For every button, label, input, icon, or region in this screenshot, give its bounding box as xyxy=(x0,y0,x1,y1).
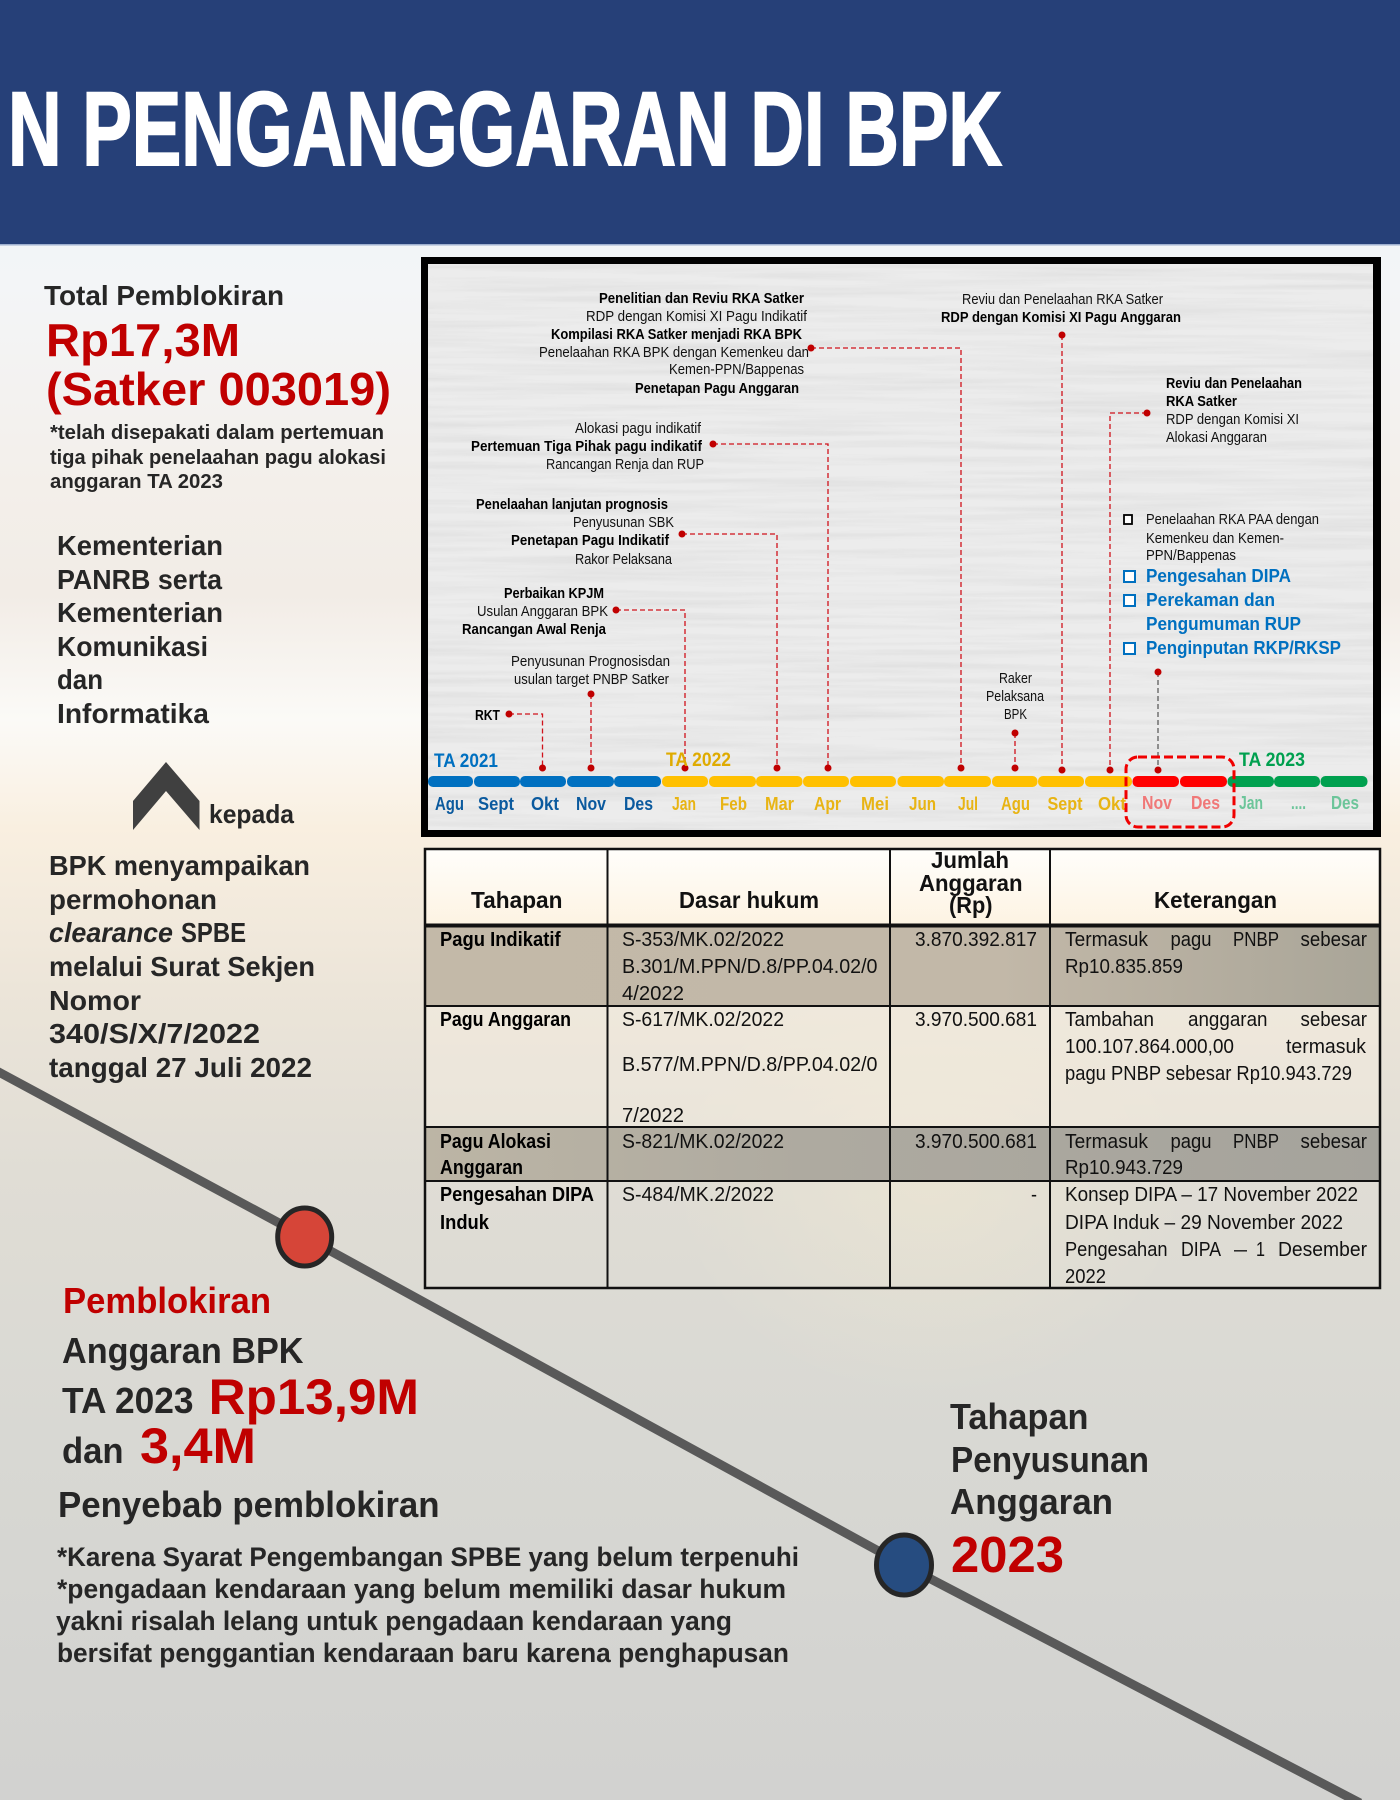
table row: pagu indikatif: pagu xyxy=(1170,929,1212,951)
timeline text: prognosis group: Penelaahan lanjutan prognosis xyxy=(476,497,668,513)
timeline text: Raker xyxy=(986,671,1045,723)
table row: pagu alokasi anggaran: Pagu Alokasi xyxy=(440,1131,551,1153)
timeline text: Raker: Pelaksana xyxy=(986,689,1045,705)
timeline text: KPJM group: Rancangan Awal Renja xyxy=(462,622,607,638)
penyebab pemblokiran block: bersifat penggantian kendaraan baru karena penghapusan xyxy=(57,1638,789,1668)
timeline month labels: Okt xyxy=(531,794,559,814)
timeline month labels: Nov xyxy=(576,794,606,814)
table row: pengesahan DIPA induk: 1 xyxy=(1256,1239,1265,1261)
tahapan penyusunan anggaran block: 2023 xyxy=(951,1526,1064,1583)
table row: pagu anggaran: S-617/MK.02/2022 xyxy=(622,1009,784,1031)
timeline text: first group: RDP dengan Komisi XI Pagu Indikatif xyxy=(586,309,808,325)
tahapan penyusunan anggaran block: Tahapan xyxy=(950,1396,1088,1437)
timeline leader dots xyxy=(506,332,1162,774)
timeline month labels: Okt xyxy=(1098,794,1126,814)
timeline text: prognosis group xyxy=(476,497,674,568)
timeline text: prognosis group: Penetapan Pagu Indikatif xyxy=(511,533,669,549)
timeline text: alokasi anggaran: RKA Satker xyxy=(1166,394,1237,410)
timeline bar segments xyxy=(428,776,1368,787)
kementerian block xyxy=(57,530,223,729)
tahapan penyusunan anggaran block: Penyusunan xyxy=(951,1439,1149,1480)
timeline text: prognosis PNBP: usulan target PNBP Satker xyxy=(514,672,669,688)
kementerian block: PANRB serta xyxy=(57,564,222,595)
table row: pagu indikatif: B.301/M.PPN/D.8/PP.04.02/0 xyxy=(622,956,878,978)
permohonan clearance block: permohonan xyxy=(49,884,217,915)
total pemblokiran block: *telah disepakati dalam pertemuan xyxy=(50,422,384,444)
timeline text: first group: Penelaahan RKA BPK dengan Kemenkeu dan xyxy=(539,345,809,361)
table row: pagu anggaran: Pagu Anggaran xyxy=(440,1009,571,1031)
timeline month labels: Feb xyxy=(720,794,747,814)
table row: pagu indikatif: S-353/MK.02/2022 xyxy=(622,929,784,951)
table row: pagu anggaran: 100.107.864.000,00 xyxy=(1065,1036,1234,1058)
timeline text: alokasi anggaran: Reviu dan Penelaahan xyxy=(1166,376,1302,392)
timeline month labels: Apr xyxy=(814,794,841,814)
permohonan clearance block: melalui Surat Sekjen xyxy=(49,951,315,982)
total pemblokiran block: Rp17,3M xyxy=(46,314,240,366)
timeline text: prognosis PNBP xyxy=(511,654,670,688)
timeline month labels: Jan xyxy=(1239,793,1263,813)
table row: pagu indikatif: PNBP xyxy=(1233,929,1279,951)
timeline text: first group: Kemen-PPN/Bappenas xyxy=(669,362,804,378)
table row fills xyxy=(425,849,1381,1181)
timeline month labels: Nov xyxy=(1142,793,1172,813)
table header: Tahapan xyxy=(471,887,562,913)
timeline checklist xyxy=(1124,512,1341,658)
permohonan clearance block: clearance xyxy=(49,917,173,948)
total pemblokiran block: tiga pihak penelaahan pagu alokasi xyxy=(50,447,386,469)
tahapan penyusunan anggaran block: Anggaran xyxy=(950,1481,1113,1522)
table row: pagu indikatif: Rp10.835.859 xyxy=(1065,956,1183,978)
table row: pagu anggaran: pagu PNBP sebesar Rp10.943.729 xyxy=(1065,1063,1352,1085)
timeline text: pagu indikatif group: Pertemuan Tiga Pihak pagu indikatif xyxy=(471,439,702,455)
table header: Keterangan xyxy=(1154,887,1277,913)
pemblokiran anggaran block: TA 2023 xyxy=(62,1380,194,1421)
timeline text: RKT: RKT xyxy=(475,708,500,724)
timeline text: prognosis PNBP: Penyusunan Prognosisdan xyxy=(511,654,670,670)
pemblokiran anggaran block: Pemblokiran xyxy=(63,1280,271,1321)
permohonan clearance block: 340/S/X/7/2022 xyxy=(49,1018,260,1049)
table row: pagu indikatif: 4/2022 xyxy=(622,983,684,1005)
timeline month labels: Des xyxy=(1331,793,1359,813)
timeline text: alokasi anggaran: RDP dengan Komisi XI xyxy=(1166,412,1299,428)
timeline month labels: Des xyxy=(624,794,653,814)
timeline text: prognosis group: Penyusunan SBK xyxy=(573,515,674,531)
timeline fiscal year labels: TA 2021 xyxy=(434,751,498,772)
timeline text: RDP pagu anggaran xyxy=(941,292,1181,326)
timeline checklist: PPN/Bappenas xyxy=(1146,548,1236,564)
timeline text: pagu indikatif group: Alokasi pagu indikatif xyxy=(575,421,702,437)
timeline text: KPJM group: Perbaikan KPJM xyxy=(504,586,604,602)
timeline checklist: Pengumuman RUP xyxy=(1146,614,1301,634)
timeline month labels xyxy=(435,793,1359,814)
table header: Anggaran xyxy=(919,870,1022,896)
total pemblokiran block: (Satker 003019) xyxy=(46,363,391,415)
timeline text: KPJM group: Usulan Anggaran BPK xyxy=(477,604,608,620)
permohonan clearance block: Nomor xyxy=(49,985,141,1016)
table row: pagu anggaran: B.577/M.PPN/D.8/PP.04.02/0 xyxy=(622,1054,878,1076)
table row: pagu alokasi anggaran: PNBP xyxy=(1233,1131,1279,1153)
table row: pengesahan DIPA induk: Pengesahan xyxy=(1065,1239,1168,1261)
table row: pagu alokasi anggaran: 3.970.500.681 xyxy=(915,1131,1037,1153)
timeline month labels: Jan xyxy=(672,794,696,814)
table header: Dasar hukum xyxy=(679,887,819,913)
timeline fiscal year labels: TA 2023 xyxy=(1239,750,1305,771)
title: N PENGANGGARAN DI BPK xyxy=(8,71,1002,188)
pemblokiran anggaran block: Anggaran BPK xyxy=(62,1330,304,1371)
penyebab pemblokiran block xyxy=(56,1484,799,1668)
kementerian block: Informatika xyxy=(57,698,209,729)
marker: blue circle xyxy=(876,1535,932,1595)
timeline fiscal year labels xyxy=(434,750,1305,772)
table xyxy=(425,847,1381,1288)
table header xyxy=(471,847,1277,918)
timeline month labels: Jul xyxy=(958,794,978,814)
table row: pengesahan DIPA induk: Konsep DIPA – 17 November 2022 xyxy=(1065,1184,1358,1206)
table row: pengesahan DIPA induk: S-484/MK.2/2022 xyxy=(622,1184,774,1206)
kementerian block: Komunikasi xyxy=(57,631,208,662)
table row: pengesahan DIPA induk: – xyxy=(1234,1239,1248,1261)
header band xyxy=(0,0,1400,246)
pemblokiran anggaran block xyxy=(62,1280,419,1474)
marker: red circle xyxy=(278,1208,332,1266)
timeline text: RDP pagu anggaran: RDP dengan Komisi XI Pagu Anggaran xyxy=(941,310,1181,326)
timeline month labels: Mar xyxy=(765,794,794,814)
table row: pagu alokasi anggaran: pagu xyxy=(1170,1131,1212,1153)
timeline checklist: Pengesahan DIPA xyxy=(1146,566,1291,586)
table row: pagu alokasi anggaran xyxy=(440,1131,1367,1179)
table row: pagu anggaran xyxy=(440,1009,1367,1127)
table row: pagu anggaran: 3.970.500.681 xyxy=(915,1009,1037,1031)
timeline text: prognosis group: Rakor Pelaksana xyxy=(575,552,673,568)
timeline month labels: Des xyxy=(1191,793,1220,813)
timeline text: Raker: BPK xyxy=(1004,707,1027,723)
total pemblokiran block xyxy=(44,280,391,493)
timeline text: KPJM group xyxy=(462,586,608,638)
table row: pagu indikatif: sebesar xyxy=(1300,929,1367,951)
timeline text: first group: Penelitian dan Reviu RKA Satker xyxy=(599,291,804,307)
timeline checklist: Perekaman dan xyxy=(1146,590,1275,610)
permohonan clearance block: tanggal 27 Juli 2022 xyxy=(49,1052,312,1083)
timeline month labels: .... xyxy=(1291,793,1306,813)
table row: pagu alokasi anggaran: sebesar xyxy=(1300,1131,1367,1153)
table row: pengesahan DIPA induk: 2022 xyxy=(1065,1266,1106,1288)
table row: pagu alokasi anggaran: S-821/MK.02/2022 xyxy=(622,1131,784,1153)
pemblokiran anggaran block: 3,4M xyxy=(140,1418,256,1474)
timeline text: pagu indikatif group: Rancangan Renja dan RUP xyxy=(546,457,704,473)
timeline checklist: Kemenkeu dan Kemen- xyxy=(1146,531,1284,547)
table grid xyxy=(425,849,1381,1288)
timeline dashed leader lines xyxy=(509,335,1158,770)
timeline text: alokasi anggaran xyxy=(1166,376,1302,446)
pemblokiran anggaran block: dan xyxy=(62,1430,124,1471)
timeline text: RDP pagu anggaran: Reviu dan Penelaahan RKA Satker xyxy=(962,292,1163,308)
table row: pagu alokasi anggaran: Rp10.943.729 xyxy=(1065,1157,1183,1179)
timeline text: pagu indikatif group xyxy=(471,421,704,473)
icon: up arrow chevron with kepada: kepada xyxy=(209,799,295,829)
table row: pagu indikatif xyxy=(440,929,1367,1005)
panel: timeline xyxy=(421,257,1381,837)
table row: pengesahan DIPA induk: Pengesahan DIPA xyxy=(440,1184,594,1206)
table row: pagu anggaran: anggaran xyxy=(1188,1009,1268,1031)
table row: pagu indikatif: Pagu Indikatif xyxy=(440,929,561,951)
table row: pagu anggaran: 7/2022 xyxy=(622,1105,684,1127)
timeline highlight box xyxy=(1126,757,1234,827)
icon: up arrow chevron with kepada xyxy=(133,762,295,830)
table header: Jumlah xyxy=(931,847,1009,873)
timeline month labels: Jun xyxy=(909,794,936,814)
timeline text: first group: Penetapan Pagu Anggaran xyxy=(635,381,799,397)
total pemblokiran block: anggaran TA 2023 xyxy=(50,471,223,493)
table row: pengesahan DIPA induk: DIPA Induk – 29 November 2022 xyxy=(1065,1212,1343,1234)
timeline month labels: Agu xyxy=(1001,794,1030,814)
diagonal connector line xyxy=(0,1070,1360,1800)
permohonan clearance block xyxy=(49,850,315,1083)
table row: pengesahan DIPA induk: Induk xyxy=(440,1212,490,1234)
table header: (Rp) xyxy=(949,892,992,918)
penyebab pemblokiran block: yakni risalah lelang untuk pengadaan kendaraan yang xyxy=(56,1606,732,1636)
table row: pengesahan DIPA induk: DIPA xyxy=(1181,1239,1222,1261)
timeline text: Raker: Raker xyxy=(999,671,1032,687)
timeline text: first group: Kompilasi RKA Satker menjadi RKA BPK xyxy=(551,327,802,343)
table row: pengesahan DIPA induk xyxy=(440,1184,1367,1288)
timeline month labels: Mei xyxy=(861,794,889,814)
kementerian block: Kementerian xyxy=(57,530,223,561)
table row: pagu indikatif: Termasuk xyxy=(1065,929,1149,951)
timeline text: first group xyxy=(539,291,809,397)
table row: pagu anggaran: Tambahan xyxy=(1065,1009,1154,1031)
timeline month labels: Sept xyxy=(478,794,514,814)
table row: pagu alokasi anggaran: Termasuk xyxy=(1065,1131,1149,1153)
tahapan penyusunan anggaran block xyxy=(950,1396,1149,1583)
timeline checklist: Penginputan RKP/RKSP xyxy=(1146,638,1341,658)
permohonan clearance block: SPBE xyxy=(181,917,246,948)
table row: pagu indikatif: 3.870.392.817 xyxy=(915,929,1037,951)
table row: pengesahan DIPA induk: Desember xyxy=(1278,1239,1367,1261)
timeline month labels: Sept xyxy=(1048,794,1082,814)
permohonan clearance block: BPK menyampaikan xyxy=(49,850,310,881)
penyebab pemblokiran block: *pengadaan kendaraan yang belum memiliki dasar hukum xyxy=(57,1574,786,1604)
table row: pengesahan DIPA induk: - xyxy=(1031,1184,1037,1206)
kementerian block: dan xyxy=(57,664,103,695)
table row: pagu anggaran: sebesar xyxy=(1300,1009,1367,1031)
penyebab pemblokiran block: Penyebab pemblokiran xyxy=(58,1484,440,1525)
timeline checklist: Penelaahan RKA PAA dengan xyxy=(1146,512,1319,528)
table row: pagu alokasi anggaran: Anggaran xyxy=(440,1157,523,1179)
table row: pagu anggaran: termasuk xyxy=(1286,1036,1367,1058)
timeline text: alokasi anggaran: Alokasi Anggaran xyxy=(1166,430,1267,446)
total pemblokiran block: Total Pemblokiran xyxy=(44,280,284,311)
timeline month labels: Agu xyxy=(435,794,464,814)
timeline fiscal year labels: TA 2022 xyxy=(666,750,731,771)
pemblokiran anggaran block: Rp13,9M xyxy=(209,1369,419,1425)
penyebab pemblokiran block: *Karena Syarat Pengembangan SPBE yang belum terpenuhi xyxy=(57,1542,799,1572)
kementerian block: Kementerian xyxy=(57,597,223,628)
